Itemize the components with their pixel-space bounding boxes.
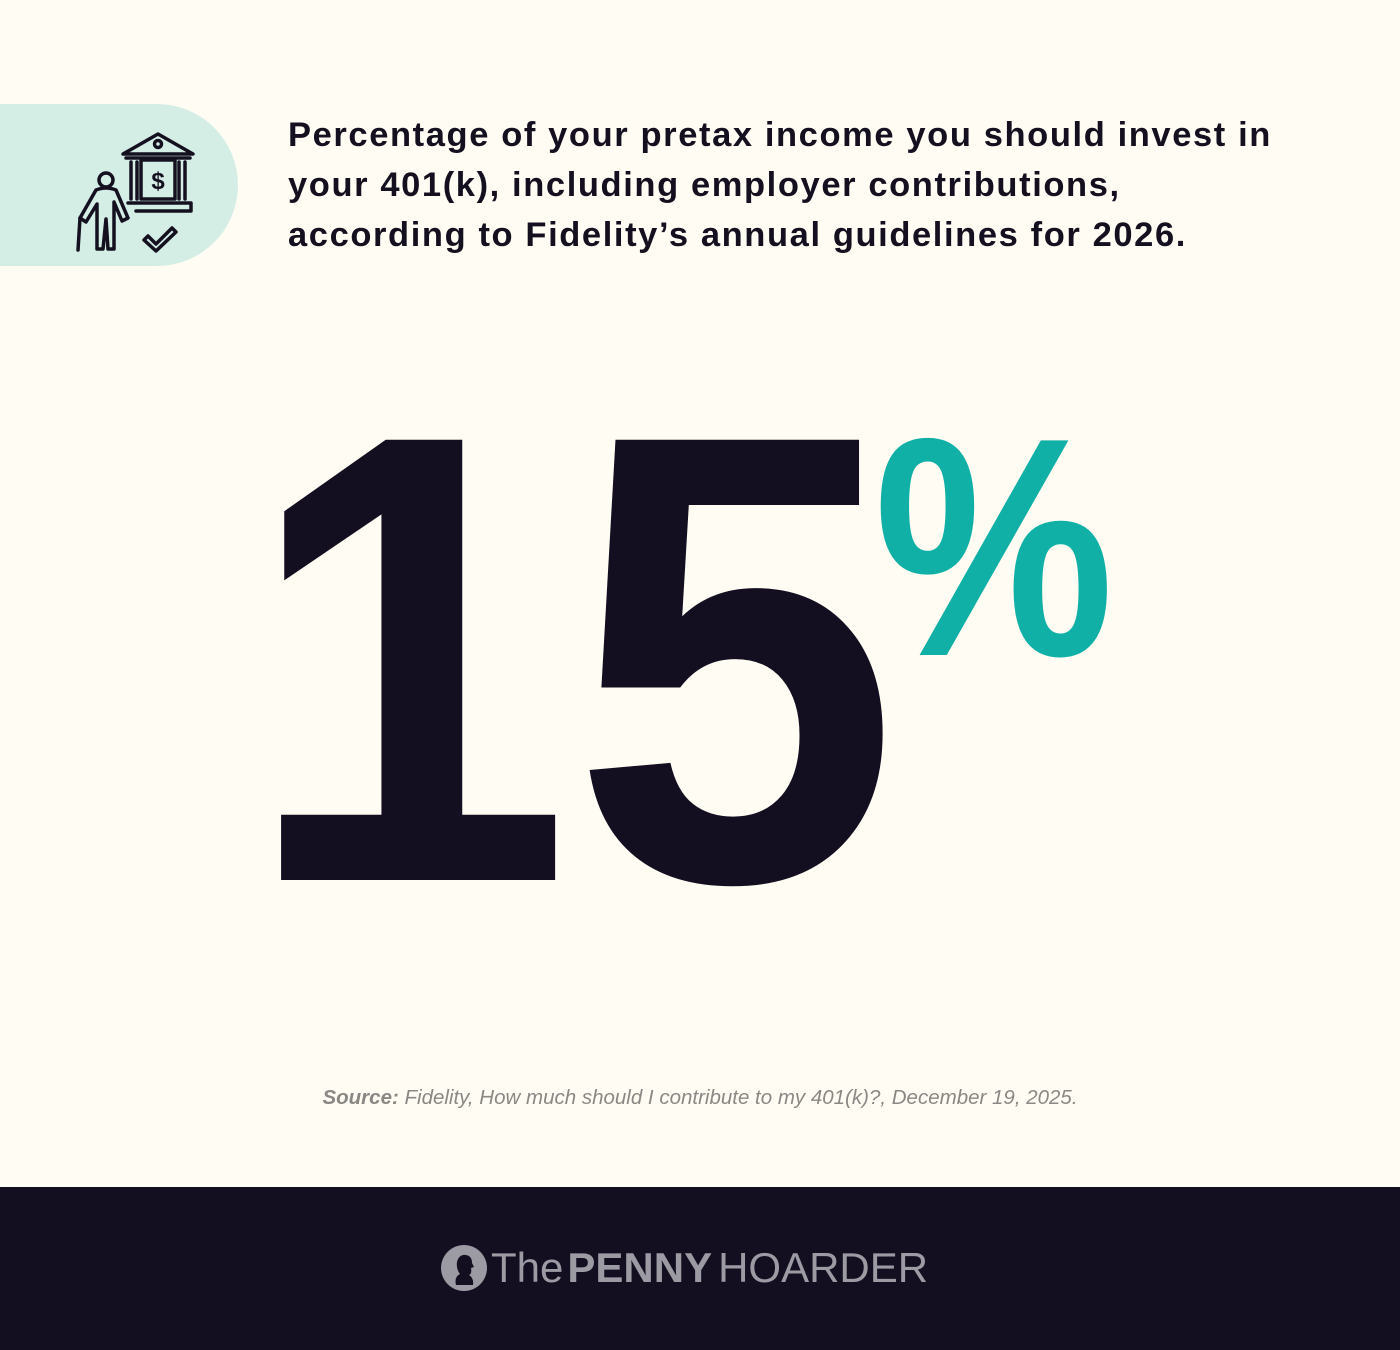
title: Percentage of your pretax income you should invest in xyxy=(288,116,1272,154)
number 15: 15 xyxy=(244,301,899,1000)
logo xyxy=(441,1244,928,1291)
title: according to Fidelity’s annual guidelines for 2026. xyxy=(288,216,1187,254)
logo: PENNY xyxy=(567,1244,712,1291)
source: Source: Fidelity, How much should I contribute to my 401(k)?, December 19, 2025. xyxy=(322,1086,1078,1109)
icon: retiree and bank xyxy=(76,132,195,253)
icon panel xyxy=(0,104,238,266)
title: your 401(k), including employer contributions, xyxy=(288,166,1121,204)
title xyxy=(288,116,1272,254)
big number 15% xyxy=(244,301,1114,1000)
icon: retiree and bank: $ xyxy=(151,168,165,195)
logo: The xyxy=(491,1244,563,1291)
percent sign: % xyxy=(874,374,1114,722)
icon: silhouette xyxy=(441,1245,487,1291)
footer xyxy=(0,1187,1400,1350)
logo: HOARDER xyxy=(718,1244,928,1291)
